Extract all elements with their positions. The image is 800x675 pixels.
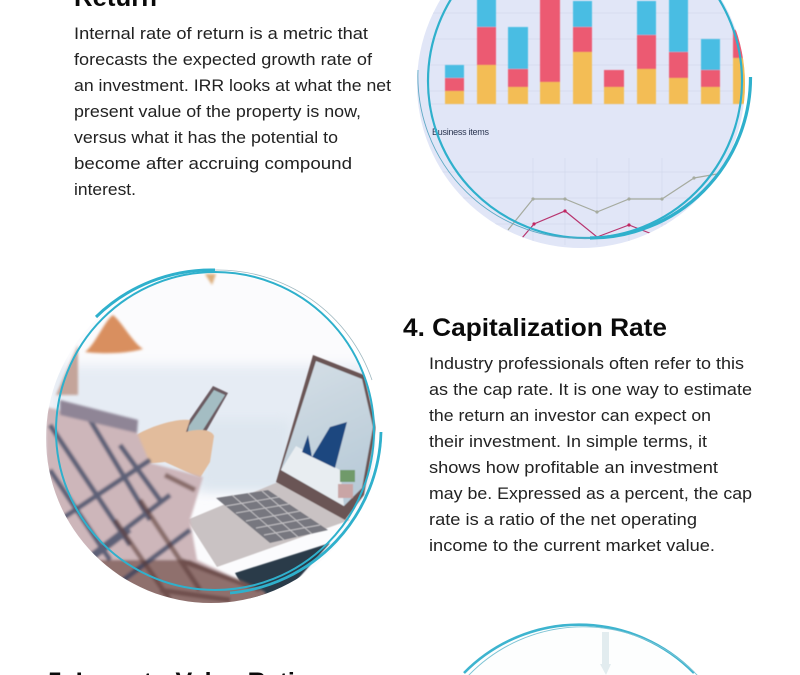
text block: capitalization rate: may be. Expressed as a percent, the cap: [429, 484, 752, 503]
pillow: [85, 315, 143, 353]
photo circle: business charts: [417, 0, 751, 250]
ring arcs: [56, 270, 381, 593]
text block: internal rate of return: Internal rate of return is a metric that: [74, 24, 368, 43]
text block: internal rate of return: become after accruing compound: [74, 154, 352, 173]
ring arcs: [464, 625, 698, 675]
text block: capitalization rate: income to the current market value.: [429, 536, 715, 555]
text block: capitalization rate: shows how profitable an investment: [429, 458, 718, 477]
heading: capitalization rate: 4. Capitalization Rate: [403, 314, 667, 342]
ring arcs: [418, 0, 751, 238]
photo circle: phone and laptop: [46, 270, 381, 610]
plaid shirt: [46, 400, 270, 610]
photo circle: bottom (cropped): [463, 623, 698, 675]
bar chart: [445, 0, 747, 104]
text block: capitalization rate: their investment. In simple terms, it: [429, 432, 707, 451]
text block: internal rate of return: versus what it has the potential to: [74, 128, 338, 147]
text block: internal rate of return: [74, 24, 391, 199]
text block: internal rate of return: an investment. IRR looks at what the net: [74, 76, 391, 95]
text block: capitalization rate: the return an investor can expect on: [429, 406, 711, 425]
line chart: [508, 174, 717, 238]
chart label: Business items: [432, 127, 490, 137]
text block: capitalization rate: [429, 354, 752, 555]
text block: capitalization rate: Industry professionals often refer to this: [429, 354, 744, 373]
text block: internal rate of return: present value of the property is now,: [74, 102, 361, 121]
text block: internal rate of return: forecasts the expected growth rate of: [74, 50, 372, 69]
phone and hand: [132, 386, 228, 478]
text block: capitalization rate: as the cap rate. It is one way to estimate: [429, 380, 752, 399]
laptop: [187, 355, 376, 600]
text block: internal rate of return: interest.: [74, 180, 136, 199]
text block: capitalization rate: rate is a ratio of the net operating: [429, 510, 697, 529]
